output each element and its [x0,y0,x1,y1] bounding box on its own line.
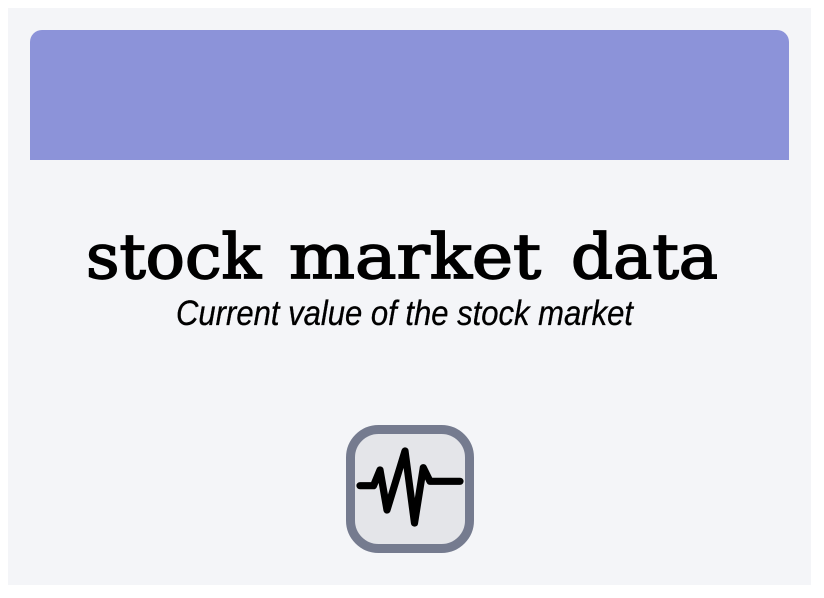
title: stock [86,220,261,293]
header banner [30,30,789,160]
icon: activity pulse [350,430,470,548]
title: data [571,220,718,293]
icon tile [350,430,470,548]
pulse line [360,451,460,523]
title [86,220,718,293]
subtitle: Current value of the stock market [176,294,634,333]
title: market [289,220,541,293]
